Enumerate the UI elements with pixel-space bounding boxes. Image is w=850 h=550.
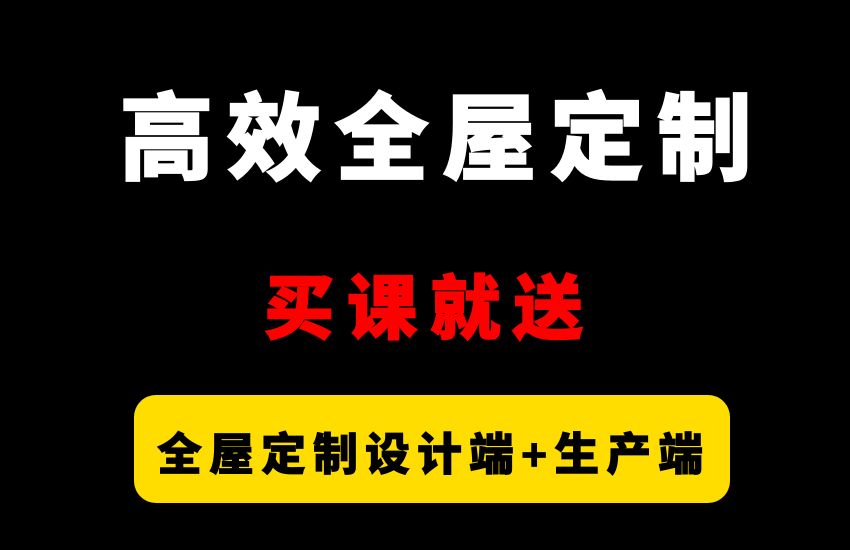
banner text: 全屋定制设计端+生产端 <box>157 429 710 480</box>
callout: yellow banner <box>134 395 730 503</box>
title: 高效全屋定制 <box>119 87 765 193</box>
subtitle: 买课就送 <box>264 270 596 348</box>
